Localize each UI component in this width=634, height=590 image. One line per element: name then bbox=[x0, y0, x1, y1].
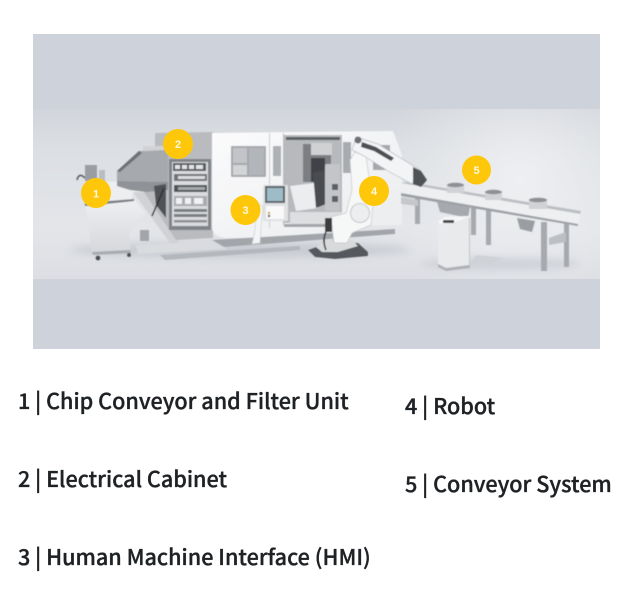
marker 5 bbox=[462, 156, 491, 184]
machine illustration bbox=[70, 131, 581, 271]
label 5: 5 | Conveyor System bbox=[405, 468, 612, 499]
label 1: 1 | Chip Conveyor and Filter Unit bbox=[18, 385, 349, 416]
conveyor parts drums bbox=[447, 183, 547, 209]
robot bbox=[308, 136, 427, 259]
machine body bbox=[212, 131, 402, 247]
robot arm bbox=[352, 137, 420, 184]
conveyor system bbox=[401, 182, 581, 271]
machining chamber bbox=[284, 135, 342, 227]
conveyor control cabinet bbox=[438, 216, 470, 271]
floor shadow bbox=[70, 242, 580, 270]
marker 4 bbox=[359, 176, 389, 206]
label 4: 4 | Robot bbox=[405, 390, 495, 421]
marker 3: 3 bbox=[242, 205, 249, 217]
image background panel bbox=[33, 34, 600, 349]
marker 5: 5 bbox=[473, 165, 480, 177]
conveyor legs bbox=[401, 196, 569, 271]
marker 3 bbox=[230, 195, 260, 225]
label 2: 2 | Electrical Cabinet bbox=[18, 463, 227, 494]
marker 1 bbox=[81, 178, 111, 208]
electrical cabinet bbox=[169, 159, 211, 230]
marker 1: 1 bbox=[93, 188, 99, 200]
operator panel HMI bbox=[263, 185, 288, 221]
rear housing and chute bbox=[117, 132, 213, 240]
label 3: 3 | Human Machine Interface (HMI) bbox=[18, 541, 371, 572]
marker 4: 4 bbox=[371, 186, 378, 198]
marker 2 bbox=[163, 129, 193, 159]
machine door window bbox=[231, 146, 266, 177]
marker 2: 2 bbox=[175, 139, 181, 151]
chip conveyor and filter unit bbox=[77, 165, 300, 260]
